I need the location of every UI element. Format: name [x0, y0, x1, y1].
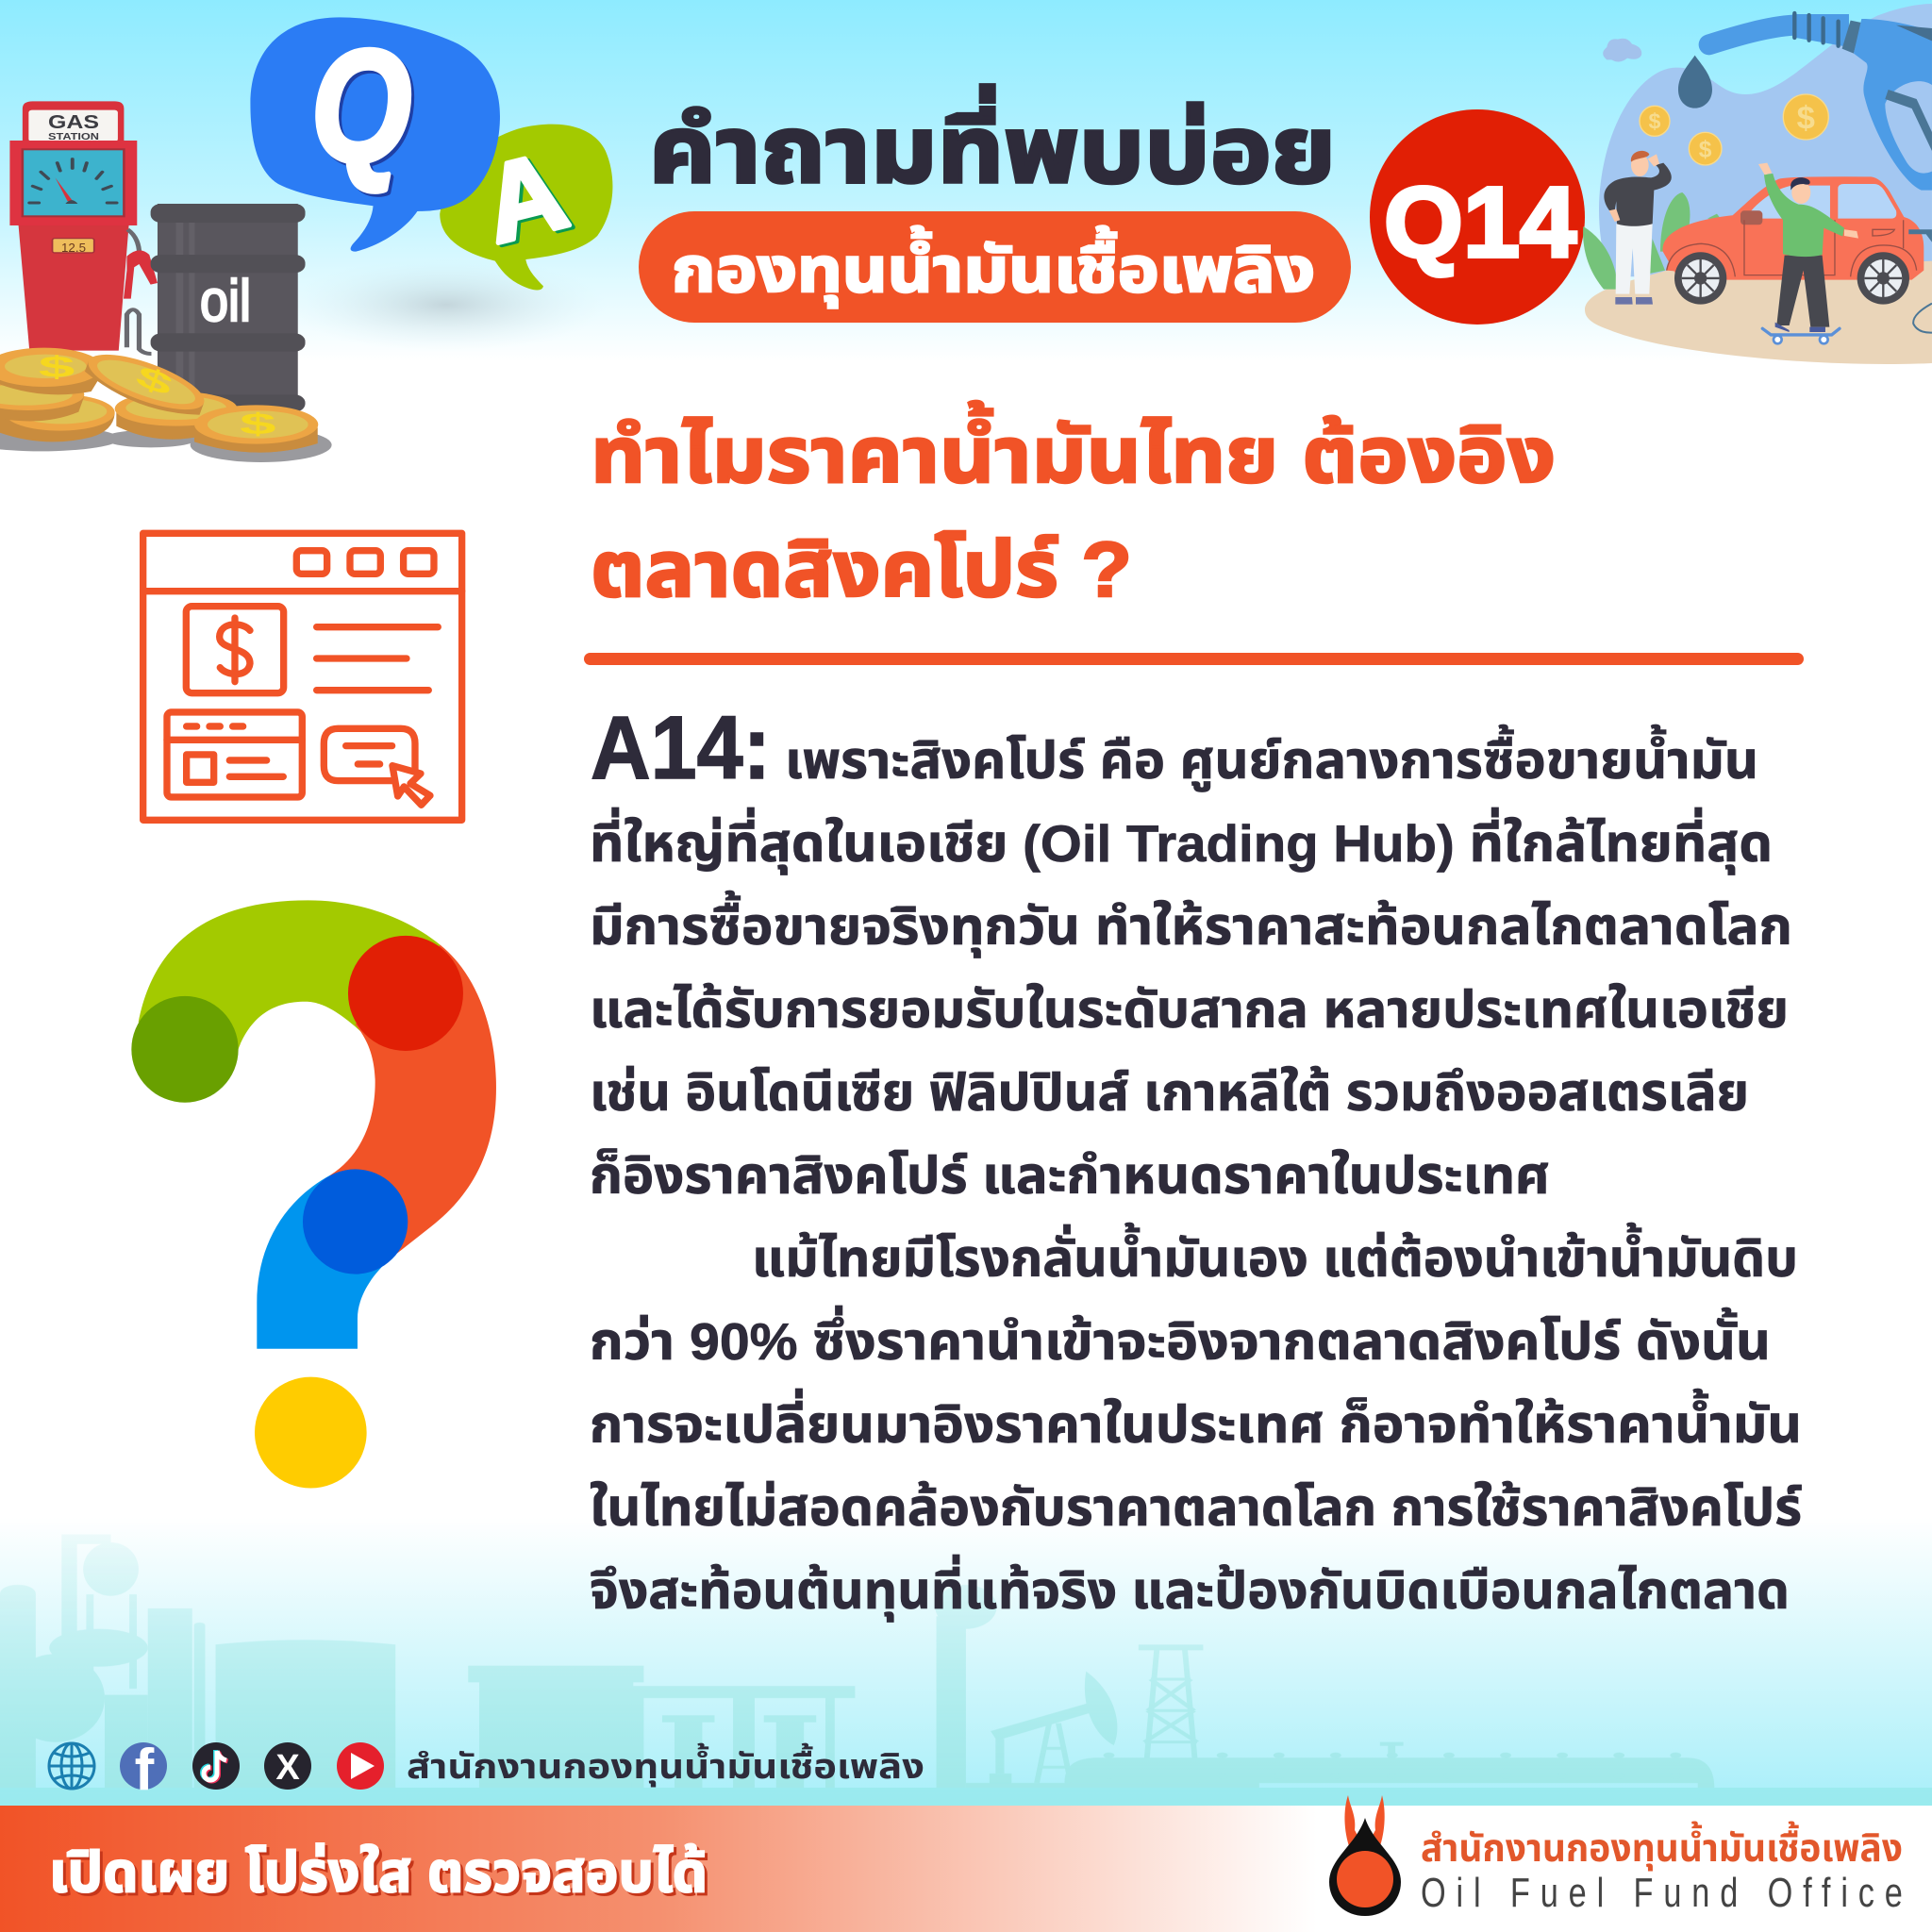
Q14 badge	[1370, 109, 1585, 325]
A bubble	[440, 125, 612, 291]
answer body text: เพราะสิงคโปร์ คือ ศูนย์กลางการซื้อขายน้ำมัน	[785, 724, 1758, 792]
pump labels: STATION	[48, 132, 99, 142]
tagline: เปิดเผย โปร่งใส ตรวจสอบได้	[49, 1840, 708, 1904]
answer body text: เช่น อินโดนีเซีย ฟิลิปปินส์ เกาหลีใต้ รวมถึงออสเตรเลีย	[590, 1063, 1749, 1122]
icon: globe	[49, 1743, 94, 1789]
logo text	[1421, 1821, 1903, 1916]
logo text: สำนักงานกองทุนน้ำมันเชื้อเพลิง	[1421, 1821, 1903, 1872]
footer band	[0, 1795, 1932, 1932]
red car	[1662, 176, 1932, 333]
icon: web trading page	[143, 533, 462, 820]
cloud	[1603, 39, 1641, 61]
letter A: A	[472, 128, 578, 266]
Q14 badge: Q14	[1384, 167, 1576, 278]
illustration: car refuel scene	[1583, 4, 1932, 364]
answer body text	[590, 698, 1802, 1622]
subtitle pill: กองทุนน้ำมันเชื้อเพลิง	[672, 225, 1315, 308]
speech bubbles Q and A	[250, 17, 612, 352]
pump labels: 12.5	[61, 241, 86, 255]
puzzled man	[1604, 151, 1672, 305]
fuel nozzle	[1709, 13, 1932, 191]
icon: facebook	[120, 1738, 167, 1803]
answer body text: ที่ใหญ่ที่สุดในเอเชีย (Oil Trading Hub) ที่ใกล้ไทยที่สุด	[590, 807, 1773, 874]
plants	[1583, 192, 1722, 290]
logo text: Oil Fuel Fund Office	[1421, 1870, 1903, 1916]
subtitle pill	[639, 211, 1351, 323]
answer label A14: A14:	[591, 698, 771, 798]
barrel label: oil	[200, 269, 251, 334]
icon: X: X	[275, 1748, 300, 1788]
pump labels	[48, 112, 99, 255]
answer body text: และได้รับการยอมรับในระดับสากล หลายประเทศในเอเชีย	[590, 980, 1789, 1039]
pump hose	[126, 229, 151, 354]
question heading: ตลาดสิงคโปร์ ?	[591, 525, 1132, 613]
letter A: A	[475, 130, 581, 269]
question heading: ทำไมราคาน้ำมันไทย ต้องอิง	[591, 400, 1556, 499]
illustration: car refuel scene: $	[1699, 138, 1712, 163]
social icons row	[49, 1738, 384, 1803]
illustration: coins	[0, 343, 332, 462]
Q bubble	[250, 17, 500, 252]
illustration: car refuel scene: $	[1797, 101, 1815, 137]
illustration: gas pump	[9, 101, 158, 354]
answer body text: จึงสะท้อนต้นทุนที่แท้จริง และป้องกันบิดเบือนกลไกตลาด	[590, 1554, 1790, 1622]
dollar coins	[1640, 94, 1828, 165]
icon: X	[264, 1742, 311, 1790]
title: คำถามที่พบบ่อย	[649, 85, 1336, 202]
pump labels: GAS	[48, 112, 99, 133]
illustration: coins: $	[131, 359, 177, 403]
illustration: car refuel scene: $	[1648, 109, 1660, 134]
divider rule	[584, 653, 1804, 665]
social handle text: สำนักงานกองทุนน้ำมันเชื้อเพลิง	[407, 1742, 924, 1787]
illustration: coins: $	[39, 350, 75, 383]
illustration: coins: $	[240, 408, 276, 441]
question mark graphic	[131, 900, 496, 1488]
sand ground	[1585, 261, 1932, 364]
blue backdrop blob	[1599, 4, 1932, 276]
logo: oil drop with flames	[1329, 1795, 1401, 1916]
letter Q: Q	[311, 17, 411, 194]
answer body text: ในไทยไม่สอดคล้องกับราคาตลาดโลก การใช้ราคาสิงคโปร์	[590, 1478, 1802, 1537]
icon: facebook: f	[135, 1738, 155, 1803]
answer body text: ก็อิงราคาสิงคโปร์ และกำหนดราคาในประเทศ	[590, 1146, 1550, 1205]
icon: youtube	[337, 1742, 384, 1790]
oil drop	[1678, 56, 1712, 108]
skateboarding man	[1758, 163, 1858, 343]
letter Q: Q	[314, 20, 414, 197]
question heading	[591, 400, 1556, 613]
refinery skyline silhouette	[0, 1535, 1932, 1808]
answer body text: มีการซื้อขายจริงทุกวัน ทำให้ราคาสะท้อนกลไกตลาดโลก	[590, 890, 1792, 958]
answer body text: แม้ไทยมีโรงกลั่นน้ำมันเอง แต่ต้องนำเข้าน้ำมันดิบ	[752, 1222, 1798, 1288]
tagline: เปิดเผย โปร่งใส ตรวจสอบได้	[52, 1843, 710, 1907]
answer body text: การจะเปลี่ยนมาอิงราคาในประเทศ ก็อาจทำให้ราคาน้ำมัน	[590, 1388, 1802, 1454]
answer body text: กว่า 90% ซึ่งราคานำเข้าจะอิงจากตลาดสิงคโปร์ ดังนั้น	[590, 1305, 1771, 1371]
illustration: oil barrel	[151, 204, 306, 412]
icon: tiktok	[192, 1742, 240, 1790]
